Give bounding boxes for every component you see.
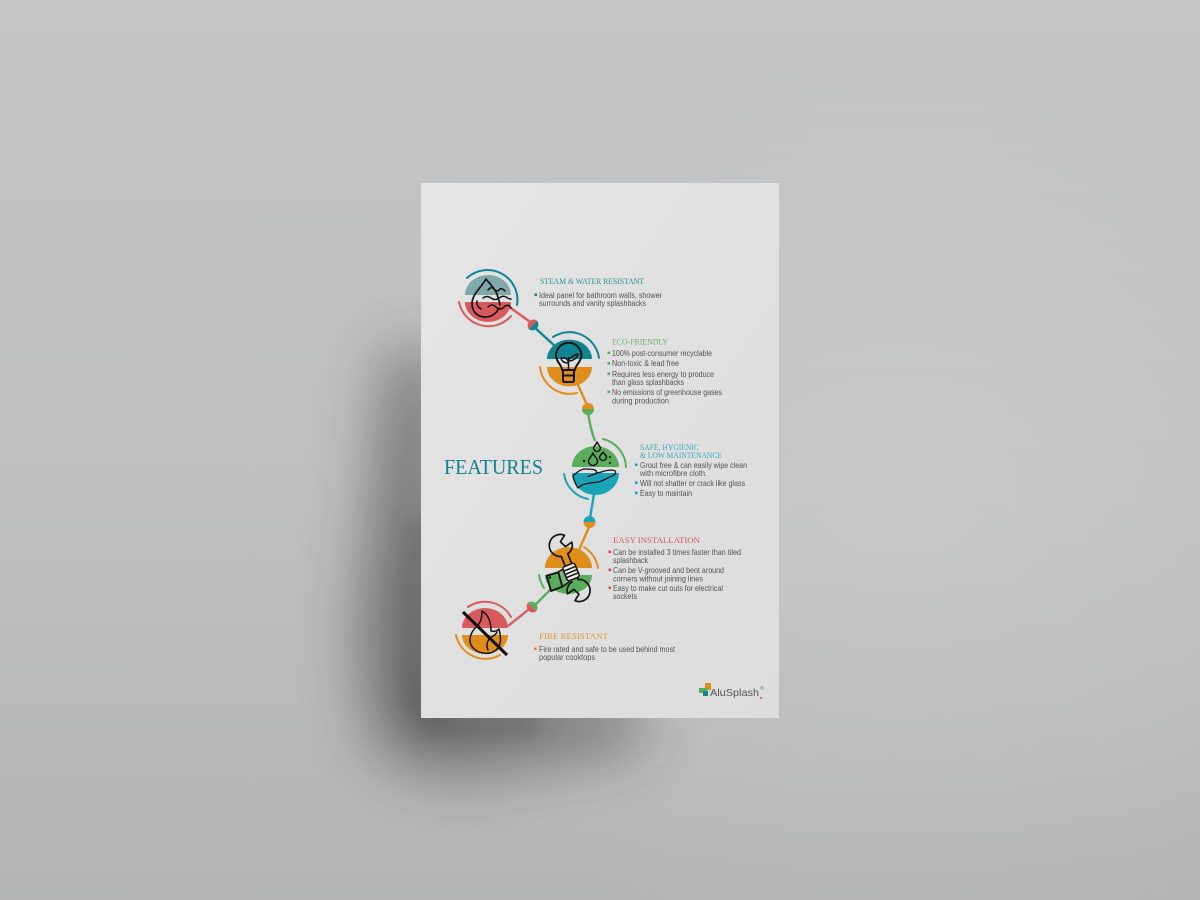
text: steam and water bullets [534,291,662,308]
logo: AluSplash: ® [760,685,764,692]
icon: easy installation wrench [539,531,598,605]
heading: safe hygienic and low maintenance: SAFE, HYGIENIC [640,443,699,452]
text: easy installation bullets: Can be V-grooved and bent around [613,566,724,575]
icon: steam and water [459,270,517,326]
logo: AluSplash [699,683,764,699]
text: eco-friendly bullets: 100% post-consumer recyclable [612,349,712,358]
text: fire resistant bullets: popular cooktops [539,653,595,662]
text: easy installation bullets: Can be installed 3 times faster than tiled [613,548,741,557]
text: easy installation bullets: corners without joining lines [613,574,703,584]
text: safe hygienic bullets: Will not shatter or crack like glass [640,479,745,488]
text: safe hygienic bullets: with microfibre cloth. [639,469,707,478]
connector lines and nodes [508,306,596,626]
icon: eco-friendly bulb [540,332,599,394]
connector: safe to install [579,494,596,550]
poster sheet [421,183,779,718]
text: easy installation bullets: sockets [613,592,637,601]
text: fire resistant bullets: Fire rated and safe to be used behind most [539,645,676,654]
text: eco-friendly bullets: during production [612,396,669,406]
text: easy installation bullets: splashback [613,556,649,565]
text: easy installation bullets [608,548,741,601]
icon: fire resistant [456,602,511,659]
heading: eco-friendly: ECO-FRIENDLY [612,338,668,346]
connector: steam to eco [508,306,556,347]
text: easy installation bullets: Easy to make cut outs for electrical [613,584,723,593]
title: features: FEATURES [444,455,543,479]
connector: eco to safe [578,385,595,441]
text: safe hygienic bullets: Easy to maintain [640,489,692,498]
logo: AluSplash: AluSplash [710,687,759,699]
text: eco-friendly bullets: No emissions of greenhouse gases [612,388,722,397]
poster shadow [362,350,640,770]
text: eco-friendly bullets: than glass splashbacks [612,378,684,387]
text: fire resistant bullets [534,645,676,662]
text: safe hygienic bullets [635,461,747,498]
text: eco-friendly bullets: Requires less energy to produce [612,370,714,379]
text: eco-friendly bullets [608,349,722,406]
heading: safe hygienic and low maintenance [640,443,722,460]
heading: safe hygienic and low maintenance: & LOW MAINTENANCE [640,451,722,460]
text: steam and water bullets: Ideal panel for bathroom walls, shower [539,291,662,300]
connector: install to fire [508,588,552,626]
icon: safe hygienic hand and drops [564,439,626,499]
text: steam and water bullets: surrounds and vanity splashbacks [539,299,646,308]
heading: easy installation: EASY INSTALLATION [613,536,700,545]
text: eco-friendly bullets: Non-toxic & lead free [612,359,679,368]
heading: steam and water resistant: STEAM & WATER RESISTANT [540,277,644,286]
heading: fire resistant: FIRE RESISTANT [539,632,608,641]
text: safe hygienic bullets: Grout free & can easily wipe clean [640,461,747,470]
